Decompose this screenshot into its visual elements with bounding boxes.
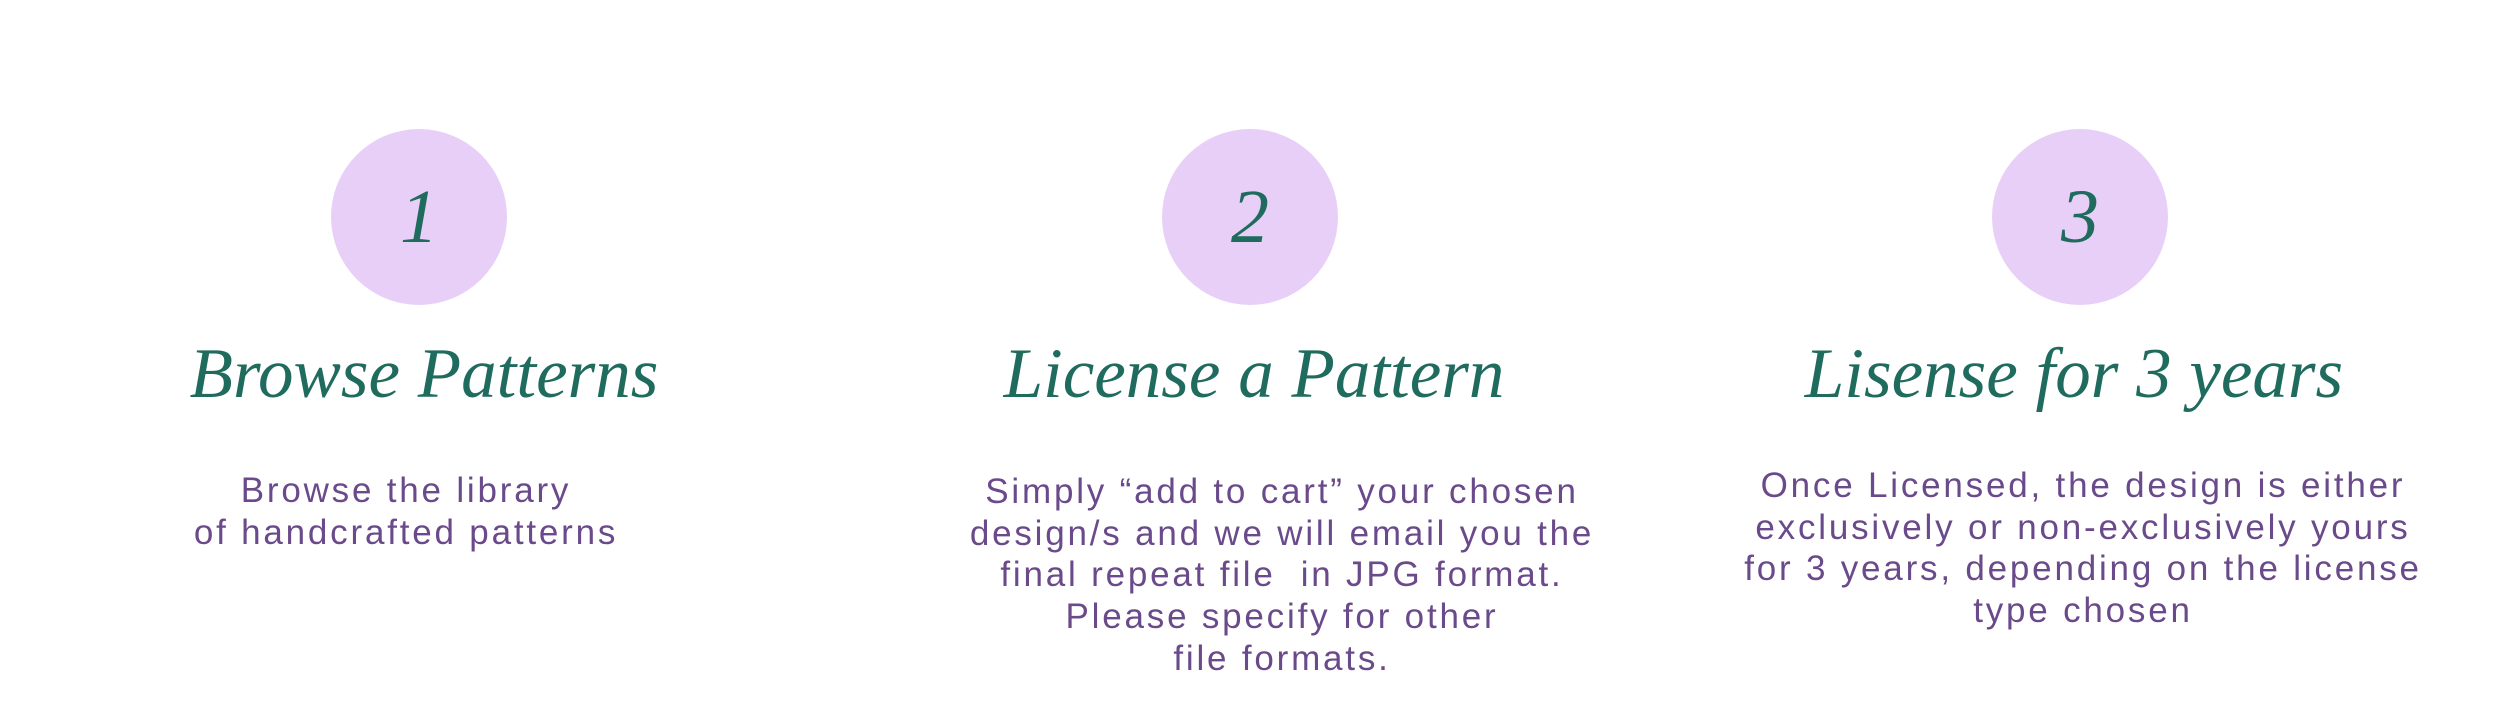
icon: circle 1 — [331, 129, 507, 305]
heading: Lisense for 3 years: Lisense for 3 years — [1805, 335, 2343, 413]
text block: step 1 description — [194, 471, 618, 552]
text block: step 3 description: exclusively or non-exclusively yours — [1755, 508, 2411, 547]
panel: step 3 — [1744, 129, 2422, 630]
text block: step 2 description: design/s and we will email you the — [970, 514, 1594, 553]
text block: step 1 description: of handcrafted patterns — [194, 513, 618, 552]
heading: Browse Patterns: Browse Patterns — [190, 335, 658, 413]
icon: circle 2: 2 — [1231, 175, 1269, 259]
text block: step 3 description: Once Licensed, the design is either — [1761, 466, 2405, 505]
text block: step 2 description: final repeat file in JPG format. — [1000, 555, 1564, 594]
text block: step 3 description — [1744, 466, 2422, 630]
text block: step 3 description: type chosen — [1973, 591, 2193, 630]
text block: step 2 description: file formats. — [1173, 639, 1391, 678]
panel: step 2 — [970, 129, 1594, 678]
panel: step 1 — [190, 129, 658, 552]
icon: circle 3 — [1992, 129, 2168, 305]
heading: License a Pattern: License a Pattern — [1004, 335, 1504, 413]
icon: circle 2 — [1162, 129, 1338, 305]
icon: circle 3: 3 — [2061, 175, 2099, 259]
icon: circle 1: 1 — [400, 175, 438, 259]
text block: step 3 description: for 3 years, depending on the license — [1744, 549, 2422, 588]
text block: step 2 description — [970, 472, 1594, 678]
text block: step 2 description: Simply “add to cart” your chosen — [985, 472, 1579, 511]
text block: step 1 description: Browse the library — [241, 471, 571, 510]
text block: step 2 description: Please specify for other — [1066, 597, 1498, 636]
